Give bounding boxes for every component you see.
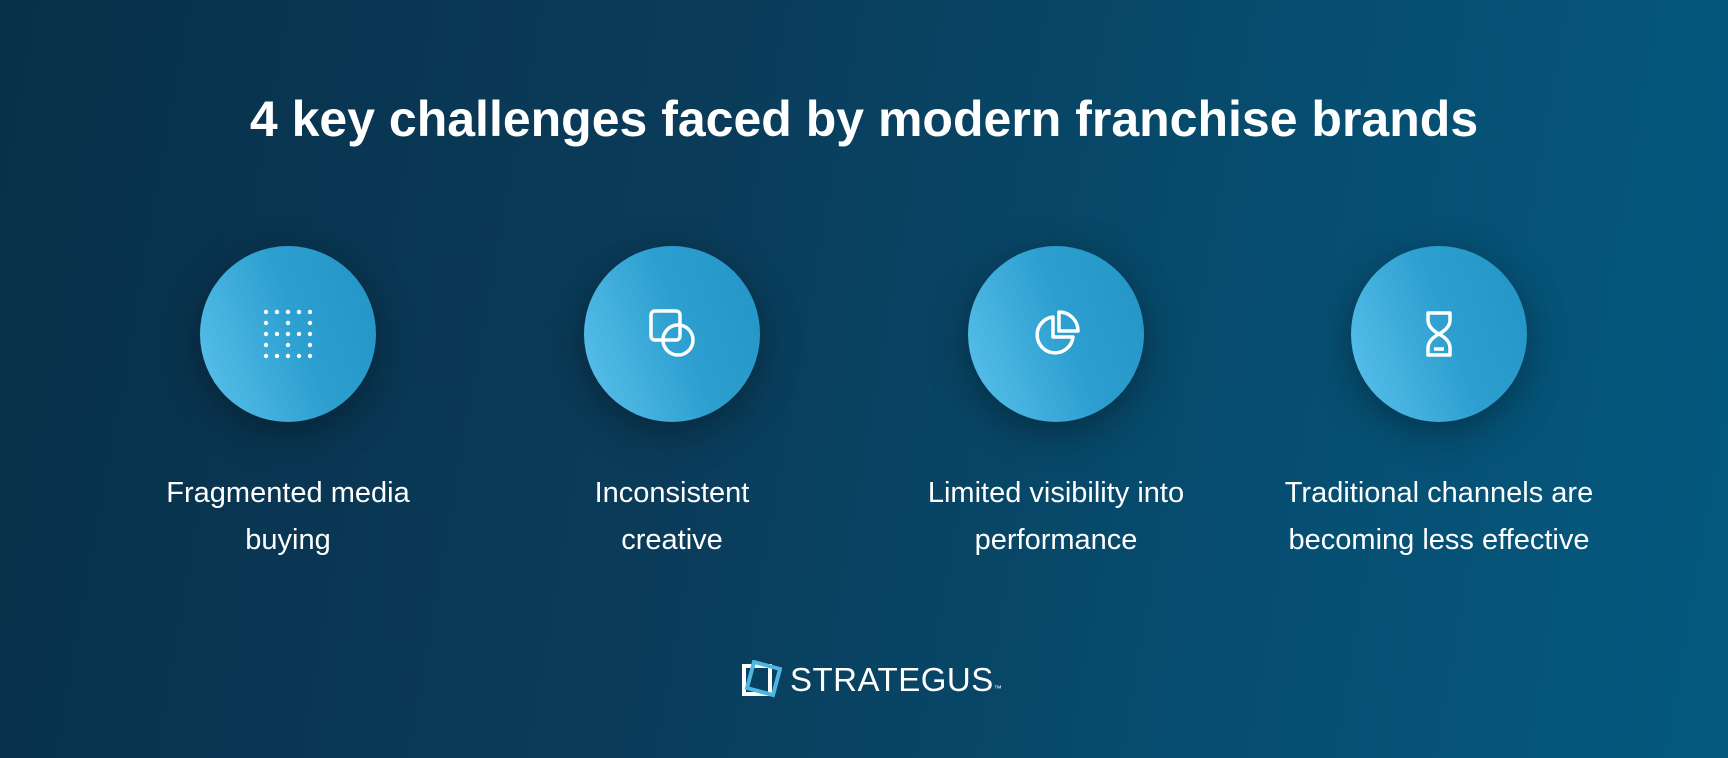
label: creative [621,524,723,556]
label [1285,477,1593,556]
icon: square and circle [584,246,760,422]
label: performance [975,524,1137,556]
label [928,477,1184,556]
label [595,477,750,556]
label: Inconsistent [595,477,749,509]
panel: inconsistent creative [574,245,771,556]
label: Limited visibility into [928,477,1184,509]
panel: traditional channels [1285,242,1593,556]
label: Traditional channels are [1285,477,1593,509]
label [166,477,410,556]
icon: pie chart [968,246,1144,422]
label: Fragmented media [166,477,410,509]
logo: STRATEGUS™ [790,661,1002,698]
title: 4 key challenges faced by modern franchise brands [250,91,1478,147]
label: buying [245,524,331,556]
panel: fragmented media buying [166,246,410,556]
icon: dot grid [200,246,376,422]
icon: hourglass [1351,246,1527,422]
panel: limited visibility [928,243,1184,556]
label: becoming less effective [1289,524,1589,556]
